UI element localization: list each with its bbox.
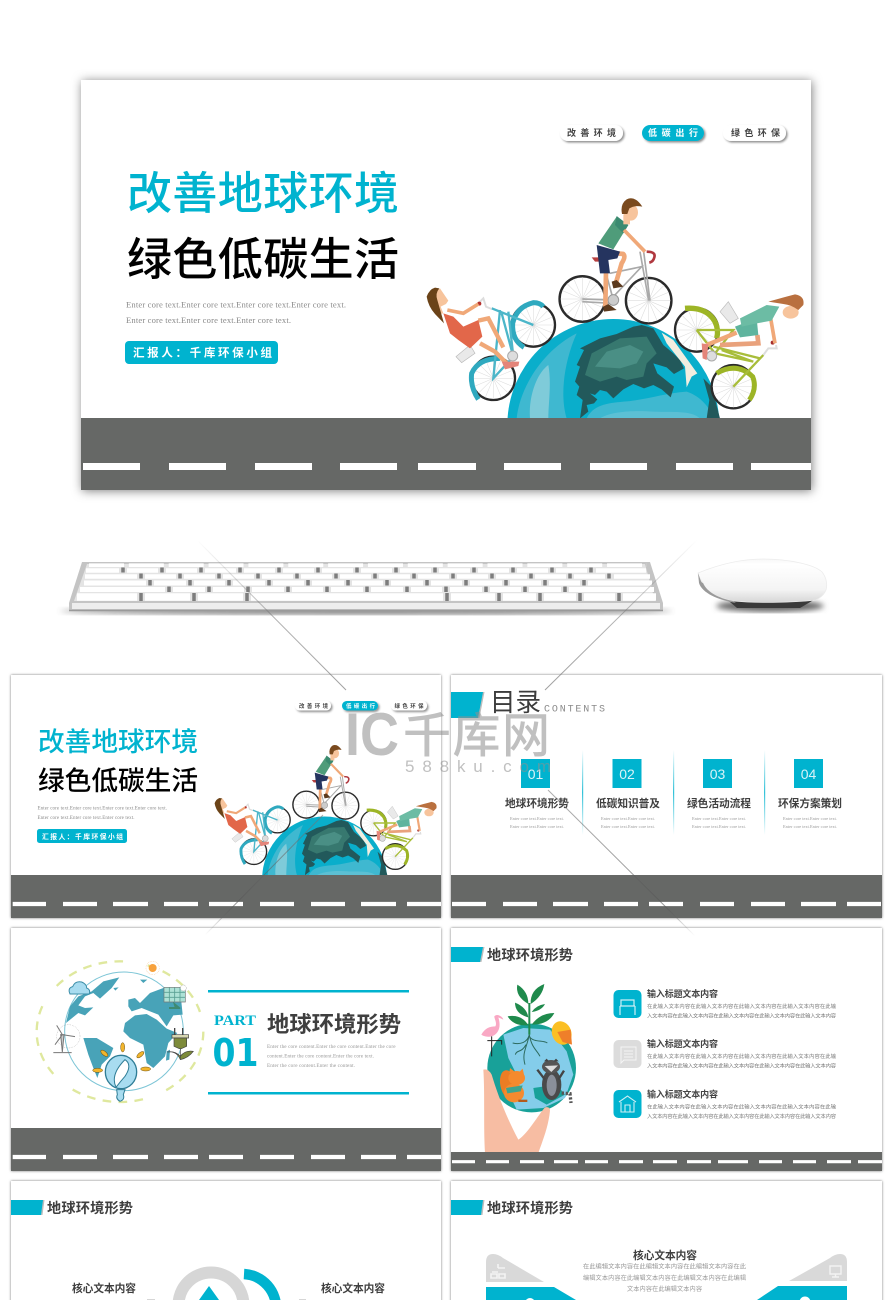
section rule top xyxy=(208,990,409,992)
info item 3: 入文本内容在此输入文本内容在此输入文本内容在此输入文本内容在此输入文本内容 xyxy=(647,1112,837,1120)
presenter badge: 汇报人：千库环保小组 xyxy=(133,346,272,360)
slide heading: 地球环境形势 xyxy=(487,947,573,964)
info item 1: 入文本内容在此输入文本内容在此输入文本内容在此输入文本内容在此输入文本内容 xyxy=(647,1012,837,1020)
ring chart blue arc xyxy=(244,1274,276,1300)
info item 3: 输入标题文本内容 xyxy=(647,1088,718,1100)
contents item 03 xyxy=(687,759,751,829)
part number: 01 xyxy=(212,1031,258,1075)
thumbnail tabs: 绿色环保 xyxy=(394,702,424,710)
illustration: cyclists riding on the earth xyxy=(427,198,804,531)
contents item 01: 地球环境形势 xyxy=(505,797,569,810)
watermark: qianku logo: 588ku.com xyxy=(405,757,551,776)
centre body text: 文本内容在此编辑文本内容 xyxy=(627,1285,702,1293)
contents item 04: Enter core text.Enter core text. xyxy=(783,824,837,829)
slide heading: 地球环境形势 xyxy=(487,1200,573,1217)
contents item 03: 03 xyxy=(710,766,725,782)
heading marker xyxy=(11,1200,44,1215)
centre body text xyxy=(583,1262,746,1293)
contents item 04: Enter core text.Enter core text. xyxy=(783,816,837,821)
hero title line 2: 绿色低碳生活 xyxy=(127,234,399,285)
contents item 01: Enter core text.Enter core text. xyxy=(510,824,564,829)
contents item 02: 02 xyxy=(619,766,635,782)
info item 3: 在此输入文本内容在此输入文本内容在此输入文本内容在此输入文本内容在此输 xyxy=(647,1102,837,1110)
panel: hero slide xyxy=(81,80,811,531)
left cyclist xyxy=(427,288,555,400)
thumbnail title line 2: 绿色低碳生活 xyxy=(38,766,198,796)
section rule bottom xyxy=(208,1092,409,1094)
contents road xyxy=(451,875,882,918)
blue panel right with gear xyxy=(757,1286,847,1300)
panel: part 01 section slide xyxy=(11,928,441,1171)
section road xyxy=(11,1128,441,1171)
thumbnail road xyxy=(11,875,441,918)
panel: core content slide left xyxy=(11,1181,441,1300)
contents item 04 xyxy=(778,759,842,829)
section description: content.Enter the core content.Enter the core text. xyxy=(267,1054,374,1060)
hero description text xyxy=(126,300,346,325)
watermark: qianku logo: IC xyxy=(345,701,399,768)
info item 2: 入文本内容在此输入文本内容在此输入文本内容在此输入文本内容在此输入文本内容 xyxy=(647,1062,837,1070)
thumbnail tabs: 改善环境 xyxy=(299,702,329,710)
illustration: mouse xyxy=(698,559,827,612)
contents item 02 xyxy=(596,759,660,829)
grey triangle left with icon xyxy=(486,1254,544,1282)
hero title line 1: 改善地球环境 xyxy=(127,168,399,219)
contents item 02: Enter core text.Enter core text. xyxy=(601,816,655,821)
panel: thumbnail cover slide xyxy=(11,675,441,942)
navigation tabs: 低碳出行 xyxy=(648,127,698,138)
contents item 04: 环保方案策划 xyxy=(778,797,842,810)
info item 2 xyxy=(614,1038,837,1070)
section title: 地球环境形势 xyxy=(267,1012,401,1037)
heading marker xyxy=(451,1200,484,1215)
heading marker xyxy=(451,692,484,718)
hero description text: Enter core text.Enter core text.Enter core text. xyxy=(126,315,291,325)
centre triangle icon xyxy=(194,1286,224,1300)
contents item 01 xyxy=(505,759,569,829)
presenter badge xyxy=(125,341,278,364)
thumbnail title line 1: 改善地球环境 xyxy=(38,727,198,757)
left label: 核心文本内容 xyxy=(72,1282,136,1295)
watermark: qianku logo: 千库网 xyxy=(403,710,550,763)
contents item 03: Enter core text.Enter core text. xyxy=(692,824,746,829)
column dividers xyxy=(582,750,765,835)
navigation tabs: 绿色环保 xyxy=(731,127,780,138)
contents item 01: 01 xyxy=(528,766,543,782)
info item 1: 在此输入文本内容在此输入文本内容在此输入文本内容在此输入文本内容在此输 xyxy=(647,1002,837,1010)
contents item 04: 04 xyxy=(801,766,816,782)
slide heading: 地球环境形势 xyxy=(47,1200,133,1217)
watermark: diagonal lines xyxy=(197,540,697,936)
watermark: qianku logo xyxy=(345,701,551,776)
panel: contents slide xyxy=(451,675,882,918)
ring chart grey xyxy=(178,1272,244,1300)
info item 3 xyxy=(614,1088,837,1120)
navigation tabs xyxy=(560,125,786,141)
small markers xyxy=(147,1299,306,1300)
globe xyxy=(507,319,720,531)
section description: Enter the core content.Enter the content. xyxy=(267,1063,355,1069)
illustration: keyboard xyxy=(60,562,672,614)
part label: PART xyxy=(214,1013,256,1029)
contents item 03: 绿色活动流程 xyxy=(687,797,751,810)
road xyxy=(81,418,811,490)
grey triangle right with icon xyxy=(789,1254,847,1281)
section description xyxy=(267,1044,396,1069)
right cyclist xyxy=(675,294,804,408)
info item 2: 输入标题文本内容 xyxy=(647,1038,718,1049)
thumbnail presenter badge xyxy=(37,829,127,843)
contents item 02: 低碳知识普及 xyxy=(596,797,660,810)
blue panel left with gear xyxy=(486,1287,576,1300)
centre body text: 编辑文本内容在此编辑文本内容在此编辑文本内容在此编辑 xyxy=(583,1274,746,1282)
centre body text: 在此编辑文本内容在此编辑文本内容在此编辑文本内容在此 xyxy=(583,1262,746,1270)
heading marker xyxy=(451,947,484,962)
panel: core content slide right xyxy=(451,1181,882,1300)
thumbnail tabs xyxy=(295,701,427,710)
thumbnail tabs: 低碳出行 xyxy=(346,702,376,710)
illustration: hand holding globe with animals xyxy=(481,984,576,1153)
contents subheading: CONTENTS xyxy=(544,704,605,716)
contents item 02: Enter core text.Enter core text. xyxy=(601,824,655,829)
centre heading: 核心文本内容 xyxy=(633,1249,697,1262)
info item 1: 输入标题文本内容 xyxy=(647,988,718,999)
hero description text: Enter core text.Enter core text.Enter core text.Enter core text. xyxy=(126,300,346,310)
right label: 核心文本内容 xyxy=(321,1282,385,1295)
panel: earth situation slide with animals xyxy=(451,928,882,1171)
thumbnail presenter badge: 汇报人：千库环保小组 xyxy=(42,832,123,841)
thumbnail description: Enter core text.Enter core text.Enter core text. xyxy=(38,816,134,821)
info item 2: 在此输入文本内容在此输入文本内容在此输入文本内容在此输入文本内容在此输 xyxy=(647,1052,837,1060)
navigation tabs: 改善环境 xyxy=(567,127,616,138)
narrow road xyxy=(451,1152,882,1171)
info item 1 xyxy=(614,988,837,1020)
middle cyclist xyxy=(560,198,671,323)
thumbnail description xyxy=(38,806,167,821)
thumbnail illustration: cyclists on earth xyxy=(215,745,437,942)
contents item 03: Enter core text.Enter core text. xyxy=(692,816,746,821)
thumbnail description: Enter core text.Enter core text.Enter core text.Enter core text. xyxy=(38,806,167,812)
illustration: green energy globe xyxy=(37,961,203,1102)
section description: Enter the core content.Enter the core content.Enter the core xyxy=(267,1044,396,1050)
contents item 01: Enter core text.Enter core text. xyxy=(510,816,564,821)
contents heading: 目录 xyxy=(490,689,541,717)
